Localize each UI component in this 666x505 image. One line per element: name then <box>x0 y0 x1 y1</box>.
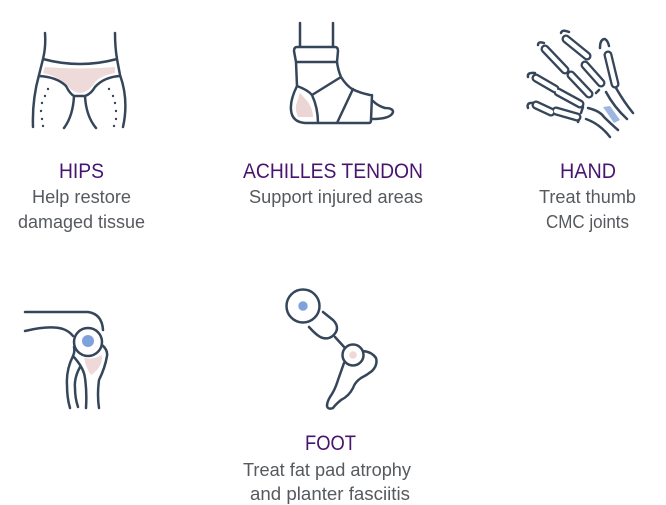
icon: knee joint <box>25 312 107 408</box>
text: foot description: and planter fasciitis <box>250 484 410 504</box>
icon: hips <box>33 33 125 128</box>
icon: foot joint <box>286 290 376 409</box>
text: hips description: Help restore <box>32 187 131 207</box>
panel: hand <box>528 31 636 232</box>
text: hand description: Treat thumb <box>539 187 636 207</box>
icon: bandaged ankle <box>291 23 393 123</box>
text: foot description <box>243 460 411 504</box>
text: hips description <box>18 187 145 232</box>
text: foot description: Treat fat pad atrophy <box>243 460 411 480</box>
heading: foot: FOOT <box>305 432 356 455</box>
panel: knee <box>25 312 107 408</box>
panel: foot <box>243 290 411 504</box>
icon: hand bones <box>528 31 633 137</box>
heading: hand: HAND <box>560 160 616 183</box>
text: achilles description: Support injured areas <box>249 187 423 207</box>
text: hand description <box>539 187 636 232</box>
heading: achilles tendon: ACHILLES TENDON <box>243 160 423 183</box>
text: hips description: damaged tissue <box>18 212 145 232</box>
panel: hips <box>18 33 145 232</box>
text: hand description: CMC joints <box>546 212 629 232</box>
heading: hips: HIPS <box>59 160 104 183</box>
panel: achilles tendon <box>243 23 423 207</box>
